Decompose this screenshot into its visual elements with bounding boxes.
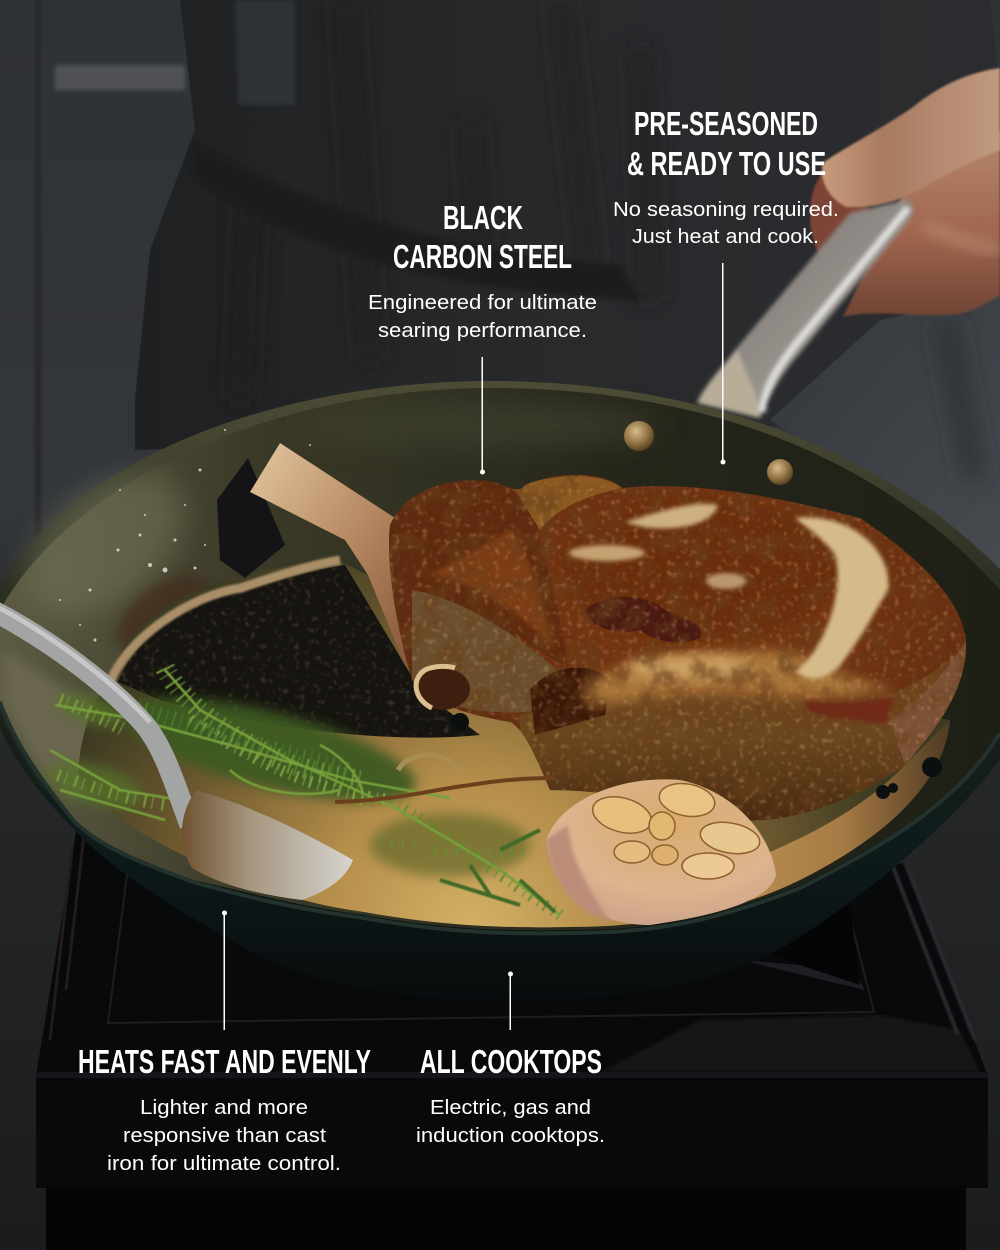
description: responsive than cast [123, 1125, 326, 1147]
spoon [0, 604, 353, 900]
texture [390, 476, 966, 820]
callout: heats fast [78, 910, 371, 1175]
fat pool right [680, 720, 950, 918]
fat cap highlight [625, 656, 755, 680]
wall panel handle [55, 65, 185, 90]
description: Electric, gas and [430, 1097, 591, 1119]
fat cap glaze [585, 651, 895, 706]
heading: BLACK [443, 199, 523, 236]
description [416, 1097, 605, 1147]
heading: PRE-SEASONED [634, 105, 818, 142]
rivet right [767, 459, 793, 485]
leader line [222, 910, 227, 1030]
callout: black carbon steel [368, 199, 597, 474]
spoon handle [0, 610, 190, 825]
steak glossy lump [530, 668, 610, 735]
callout: all cooktops [416, 972, 605, 1147]
wall panel seam [35, 0, 41, 600]
description: Lighter and more [140, 1097, 308, 1119]
heading [627, 105, 826, 182]
leader line [480, 357, 485, 474]
stove [36, 820, 988, 1250]
steak left crust [390, 480, 568, 668]
spoon bowl [182, 790, 353, 900]
chef thumb [822, 68, 1000, 207]
top bump [515, 476, 622, 530]
description: searing performance. [378, 320, 587, 342]
garlic bulb [546, 779, 776, 925]
butter foam [569, 504, 888, 678]
steak body [380, 465, 980, 835]
bone shadow [217, 458, 285, 578]
leader line [720, 263, 726, 464]
pan handle [697, 200, 913, 418]
herbs [42, 668, 560, 915]
steak centre glaze [560, 500, 840, 640]
steak right side edge [890, 640, 966, 765]
red side patch [805, 695, 895, 725]
heading: CARBON STEEL [393, 238, 572, 275]
meat pocket [585, 597, 701, 643]
heading: ALL COOKTOPS [420, 1043, 602, 1080]
pan front lip highlight [0, 702, 1000, 933]
crust highlight [430, 530, 555, 650]
description: induction cooktops. [416, 1125, 605, 1147]
peppercorns [451, 713, 942, 799]
heading: & READY TO USE [627, 145, 826, 182]
description: iron for ultimate control. [107, 1153, 341, 1175]
spoon handle highlight [0, 604, 150, 722]
bone marrow ring [414, 666, 470, 710]
description: Just heat and cook. [632, 226, 819, 248]
pan [0, 381, 1000, 1000]
chef apron [135, 0, 1000, 570]
bone [250, 443, 425, 690]
heading [393, 199, 572, 275]
description [613, 199, 839, 248]
description: Engineered for ultimate [368, 292, 597, 314]
pan outer body [0, 381, 1000, 1000]
steak side sear [520, 640, 970, 830]
description [368, 292, 597, 342]
wall warm tint [103, 559, 227, 671]
scorched fat area [118, 565, 480, 738]
pan sparkles [59, 429, 311, 642]
wall reflection top [300, 401, 660, 449]
steak underside [412, 590, 560, 713]
description: No seasoning required. [613, 199, 839, 221]
leader line [508, 972, 513, 1030]
pan inner wall [0, 388, 1000, 930]
heading: HEATS FAST AND EVENLY [78, 1043, 371, 1080]
fat edge highlight [110, 560, 340, 683]
wall reflection left [0, 446, 210, 644]
rivet left [624, 421, 654, 451]
chef hand palm [810, 130, 1000, 317]
cooking fat pool [78, 560, 950, 927]
wall reflection lower left [3, 650, 110, 800]
callout: pre-seasoned [613, 105, 839, 464]
description [107, 1097, 341, 1175]
